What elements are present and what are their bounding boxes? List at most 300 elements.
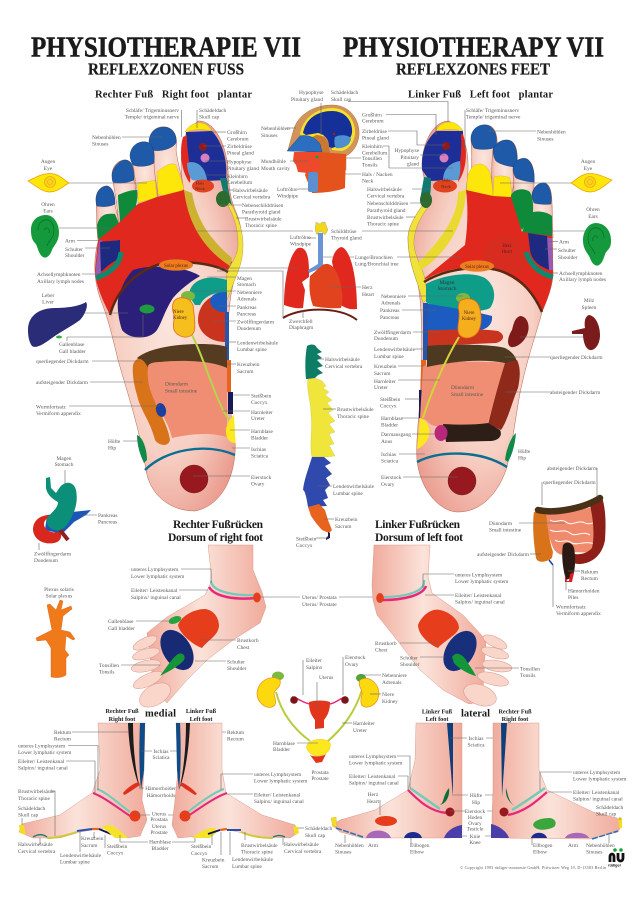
label: sacrum: Sacrum xyxy=(81,843,98,849)
label: uterus prostate: Uterus xyxy=(152,824,166,830)
label: salpinx: Salpinx/ inguinal canal xyxy=(254,799,304,805)
label: bladder: Bladder xyxy=(151,846,169,852)
label: pituitary: Pituitary gland xyxy=(291,97,323,103)
label: parathyroid xyxy=(367,201,428,214)
label: rectum: Rectum xyxy=(227,736,245,742)
label: diaphragm: Zwerchfell xyxy=(289,319,313,325)
organ: bladder zone xyxy=(417,418,430,449)
label: axillary xyxy=(553,271,606,283)
label: salpinx xyxy=(548,790,623,802)
label: sacrum xyxy=(81,832,104,849)
organ: kidney zone xyxy=(172,298,195,337)
label: heart xyxy=(328,285,374,298)
label: chest xyxy=(200,638,259,651)
label: solar plexus: Plexus solaris xyxy=(44,587,74,593)
label: skull cap: Schädeldach xyxy=(18,806,45,812)
label: skull cap: Schädeldach xyxy=(596,805,623,811)
label: pancreas xyxy=(218,305,256,318)
label: sciatica xyxy=(381,452,425,464)
label: windpipe xyxy=(290,234,316,248)
label: descending colon xyxy=(547,466,598,497)
zone: knee xyxy=(491,824,509,838)
label: skull cap xyxy=(331,90,448,122)
label: liver: Liver xyxy=(42,300,54,306)
label: lumbar: Lendenwirbelsäule xyxy=(237,340,278,346)
label: salpinx xyxy=(131,588,208,601)
label: uterus prostate: Uterus xyxy=(152,812,166,818)
label: tonsils: Tonsils xyxy=(520,673,536,679)
zone: sciatica stripe xyxy=(139,723,145,790)
label: thyroid xyxy=(197,229,453,242)
label: thoracic: Brustwirbelsäule xyxy=(241,843,278,849)
label: skull cap: Skull cap xyxy=(305,833,326,839)
label: solar plexus: Solar plexus xyxy=(46,594,72,600)
label: sinuses: Sinuses xyxy=(261,133,277,139)
foot shape xyxy=(172,723,298,838)
organ: brainstem xyxy=(311,135,331,156)
label: cervical: Halswirbelsäule xyxy=(18,842,53,848)
label: adrenals xyxy=(192,290,262,302)
logo: ruediger: rüdiger xyxy=(608,864,622,868)
label: transverse colon xyxy=(505,355,603,361)
label: arm: Arm xyxy=(568,843,579,849)
label: ureter: Harnleiter xyxy=(374,379,396,385)
heading: right dorsum: Rechter Fußrücken xyxy=(173,519,264,531)
label: adrenals xyxy=(360,673,407,686)
label: ureter xyxy=(342,721,375,734)
zone: lymph band xyxy=(382,580,424,597)
label: mouth: Mouth cavity xyxy=(261,166,290,172)
label: windpipe: Windpipe xyxy=(277,194,299,200)
heading: lateral xyxy=(422,708,532,723)
organ: coccyx xyxy=(326,532,330,540)
zone: heart: Herz xyxy=(502,244,512,249)
zone: sciatica xyxy=(501,723,507,797)
label: thoracic: Brustwirbelsäule xyxy=(337,407,374,413)
label: skull cap: Schädeldach xyxy=(199,108,226,114)
zone: lungs red xyxy=(420,190,553,312)
organ: pancreas zone xyxy=(210,292,227,312)
label: knee xyxy=(460,834,497,846)
label: elbow: Ellbogen xyxy=(533,843,552,849)
label: sinuses: Sinuses xyxy=(92,142,108,148)
label: cervical: Halswirbelsäule xyxy=(325,357,360,363)
label: windpipe: Windpipe xyxy=(290,242,312,248)
label: uterus: Uterus xyxy=(319,675,333,681)
zone: eyes yellow xyxy=(138,164,184,203)
organ: ascending colon xyxy=(533,512,553,562)
organ: right kidney xyxy=(359,678,379,707)
icon: eye xyxy=(28,173,69,192)
label: tonsils xyxy=(475,666,540,679)
label: ear xyxy=(545,207,600,231)
panel: urogenital diagram xyxy=(257,655,407,782)
label: eye: Eye xyxy=(584,166,593,172)
label: tonsils: Tonsillen xyxy=(99,663,119,669)
organ: thyroid xyxy=(315,222,328,235)
labels: medial centre xyxy=(120,730,245,852)
zone: eyes yellow xyxy=(466,164,512,203)
label: pancreas: Pancreas xyxy=(98,520,117,526)
label: coccyx: Steißbein xyxy=(191,844,211,850)
label: lymph xyxy=(131,567,211,583)
label: skull cap: Schädeldach xyxy=(331,90,358,96)
label: liver xyxy=(42,293,128,313)
zone: elbow xyxy=(404,832,422,838)
label: cervical: Cervical vertebra xyxy=(325,364,363,370)
zone: uterus xyxy=(130,810,140,822)
label: transverse colon xyxy=(36,359,140,365)
label: anus xyxy=(381,432,436,445)
icon: eye xyxy=(571,173,612,192)
label: knee: Knee xyxy=(469,840,481,846)
label: pineal: Zirbeldrüse xyxy=(362,129,387,135)
label: pituitary: Hypophyse xyxy=(299,90,324,96)
label: axillary xyxy=(37,272,100,285)
label: transverse colon: querliegender Dickdarm xyxy=(550,355,603,361)
label: tonsils: Tonsils xyxy=(99,670,114,676)
zone: ovary xyxy=(180,465,208,493)
label: anus: Darmausgang xyxy=(381,432,411,438)
label: ovary testicle: Testicle xyxy=(467,826,484,832)
label: salpinx xyxy=(303,658,323,695)
label: piles: Piles xyxy=(568,595,578,601)
organ: transverse colon zone xyxy=(137,344,227,368)
label: lumbar: Lumbar spine xyxy=(333,491,363,497)
label: liver: Leber xyxy=(42,293,54,299)
organ: face and mouth xyxy=(293,152,320,173)
label: uterus prostate center: Uterus/ Prostata xyxy=(302,595,337,601)
label: lymph xyxy=(423,572,509,588)
zone: heart: Heart xyxy=(502,250,513,255)
organ: duodenum zone xyxy=(428,329,503,346)
label: ovary xyxy=(343,655,366,695)
spine strip xyxy=(419,303,428,418)
label: sciatica: Sciatica xyxy=(152,755,170,761)
label: sciatica: Sciatica xyxy=(251,454,269,460)
label: adrenals: Nebenniere xyxy=(382,673,407,679)
label: thoracic: Brustwirbelsäule xyxy=(18,789,55,795)
heading: lateral: lateral xyxy=(461,708,490,720)
label: ureter: Harnleiter xyxy=(251,410,273,416)
label: duodenum xyxy=(374,329,440,342)
label: thoracic: Thoracic spine xyxy=(367,222,399,228)
organ: appendix xyxy=(549,560,553,565)
label: duodenum: Zwölffingerdarm xyxy=(34,552,71,558)
panel: thorax xyxy=(217,222,374,331)
organ: stomach xyxy=(46,477,77,531)
label: gall bladder: Gallenblase xyxy=(108,619,133,625)
organ: ureter xyxy=(423,337,459,418)
label: neck xyxy=(335,172,393,184)
foot shape xyxy=(332,723,462,838)
zone: sinuses xyxy=(592,831,618,839)
zone: uterus xyxy=(376,593,384,603)
label: stomach: Stomach xyxy=(237,282,256,288)
organ: kidney zone: Kidney xyxy=(462,317,477,322)
sole strip xyxy=(19,825,128,838)
organ: stomach zone xyxy=(426,274,494,311)
text: small intestine: Small intestine xyxy=(165,388,198,394)
organ: duodenum tube xyxy=(60,530,68,540)
label: chest xyxy=(375,641,438,654)
organ: cervical vertebrae xyxy=(305,345,323,379)
label: sinuses xyxy=(92,135,162,148)
organ: left lung xyxy=(284,248,309,308)
icon: ear xyxy=(31,215,59,258)
label: sinuses: Sinuses xyxy=(537,136,553,142)
organ: adrenal xyxy=(456,293,470,303)
zone: gall bladder xyxy=(168,614,182,626)
organ: duodenum zone xyxy=(198,293,227,342)
label: pineal xyxy=(362,129,445,145)
zone: lymph band xyxy=(188,789,224,812)
label: spleen: Milz xyxy=(584,298,594,304)
label: ureter xyxy=(374,379,440,391)
zone: axillary lymph nodes xyxy=(96,252,121,278)
label: thoracic xyxy=(241,832,278,856)
label: lymph xyxy=(18,744,98,790)
label: stomach: Magen xyxy=(57,456,71,462)
label: stomach xyxy=(55,456,74,490)
label: lymph: unteres Lymphsystem xyxy=(455,572,502,578)
label: elbow xyxy=(532,838,553,856)
zone: ovary xyxy=(446,808,454,816)
label: sacrum xyxy=(202,832,225,870)
label: skull cap xyxy=(18,806,46,825)
label: pancreas: Pankreas xyxy=(237,305,256,311)
panel: medial right foot xyxy=(18,723,147,866)
label: windpipe: Luftröhre xyxy=(277,187,298,193)
label: adrenals: Adrenals xyxy=(381,300,400,306)
label: skull cap xyxy=(197,108,227,128)
label: lumbar xyxy=(318,484,375,497)
label: sciatica: Ischias xyxy=(251,447,266,453)
label: hip xyxy=(518,448,531,462)
label: prostate: Prostate xyxy=(311,776,329,782)
label: cerebellum: Kleinhirn xyxy=(227,174,248,180)
label: adrenals: Nebenniere xyxy=(381,294,406,300)
organ: uterus xyxy=(309,700,330,729)
label: hip: Hip xyxy=(518,456,526,462)
label: temple nerve: Temple/ trigeminal nerve xyxy=(466,114,521,120)
label: parathyroid: Nebenschilddrüsen xyxy=(367,201,408,207)
label: cervical xyxy=(224,188,271,200)
zone: sciatica xyxy=(447,723,453,797)
icon: liver xyxy=(28,302,87,347)
label: eye xyxy=(41,159,147,183)
big toe zones: Neck xyxy=(441,184,452,189)
label: skull cap: Skull cap xyxy=(596,812,617,818)
label: shoulder: Schulter xyxy=(65,247,83,253)
label: parathyroid: Parathyroid gland xyxy=(242,210,281,216)
labels: lateral centre xyxy=(450,736,505,846)
label: elbow xyxy=(410,838,430,856)
label: pineal: Pineal gland xyxy=(227,150,254,156)
label: parathyroid: Parathyroid gland xyxy=(367,208,406,214)
label: pineal xyxy=(203,144,254,156)
label: lymph: unteres Lymphsystem xyxy=(254,772,301,778)
label: adrenals xyxy=(381,294,463,306)
label: coccyx: Coccyx xyxy=(380,404,397,410)
label: uterus prostate: Prostate xyxy=(150,830,168,836)
label: lymph xyxy=(540,770,627,790)
label: sciatica: Ischias xyxy=(381,452,396,458)
organ: lumbar vertebrae xyxy=(303,457,332,507)
label: temple nerve xyxy=(125,107,182,137)
label: kidney: Niere xyxy=(382,692,394,698)
label: arm xyxy=(65,238,98,244)
label: lymph: unteres Lymphsystem xyxy=(349,754,396,760)
zone: lymph band xyxy=(211,581,256,595)
label: sacrum: Kreuzbein xyxy=(202,858,224,864)
label: cervical xyxy=(18,838,56,855)
label: rectum xyxy=(54,730,128,742)
label: lymph: Lower lymphatic system xyxy=(18,750,72,756)
organ: appendix zone xyxy=(154,402,168,418)
label: pancreas: Pankreas xyxy=(98,513,117,519)
label: cerebrum: Cerebrum xyxy=(227,136,249,142)
label: pineal: Pineal gland xyxy=(362,136,389,142)
label: skull cap xyxy=(596,805,624,820)
label: coccyx xyxy=(105,835,128,856)
text: small intestine: Dünndarm xyxy=(451,385,474,391)
zone: olive band xyxy=(418,190,466,270)
label: cervical: Halswirbelsäule xyxy=(233,188,268,194)
label: sciatica: Ischias xyxy=(469,736,483,742)
text: small intestine: Small intestine xyxy=(451,392,484,398)
zone: axillary lymph nodes xyxy=(526,252,553,277)
label: chest: Chest xyxy=(237,645,250,651)
label: small intestine: Dünndarm xyxy=(489,521,512,527)
label: lung: Lunge/Bronchien xyxy=(355,255,393,261)
label: ascending colon: aufsteigender Dickdarm xyxy=(36,379,89,386)
toes: right foot xyxy=(96,127,184,240)
label: cervical: Cervical vertebra xyxy=(18,849,56,855)
heading: medial: medial xyxy=(145,708,176,720)
label: ovary: Eierstock xyxy=(381,475,401,481)
zone: sinuses blue toes xyxy=(96,127,176,207)
title: German: PHYSIOTHERAPIE VII xyxy=(31,32,301,64)
panel: stomach diagram xyxy=(33,456,117,564)
label: thoracic: Thoracic spine xyxy=(241,850,273,856)
label: appendix xyxy=(36,404,160,417)
label: coccyx xyxy=(191,833,212,857)
label: sacrum xyxy=(324,517,358,530)
label: salpinx: Eileiter/ Leistenkanal xyxy=(18,759,64,765)
label: shoulder: Schulter xyxy=(558,248,576,254)
zone: heart xyxy=(375,816,397,826)
label: sinuses: Sinuses xyxy=(335,850,351,856)
zone: shoulder xyxy=(153,624,201,676)
label: lumbar: Lendenwirbelsäule xyxy=(333,484,374,490)
organ: sinus cavity xyxy=(287,135,322,152)
zone: lymph band xyxy=(410,788,440,809)
label: duodenum xyxy=(214,318,275,332)
zone: uterus xyxy=(253,592,261,602)
label: lumbar xyxy=(226,340,279,353)
label: thoracic: Brustwirbelsäule xyxy=(245,216,282,222)
label: heart: Heart xyxy=(367,799,379,805)
label: pituitary: Hypophyse xyxy=(227,159,252,165)
label: shoulder: Shoulder xyxy=(65,253,85,259)
panel: left foot plantar xyxy=(408,121,553,512)
zone: hemorrhoids xyxy=(123,782,140,795)
zone: inguinal band xyxy=(508,792,547,815)
label: mouth xyxy=(261,159,308,172)
label: transverse colon xyxy=(542,480,596,505)
organ: liver zone xyxy=(118,267,200,338)
label: shoulder: Schulter xyxy=(227,660,245,666)
label: pineal: Zirbeldrüse xyxy=(227,144,252,150)
label: hip: Hip xyxy=(108,446,116,452)
label: coccyx: Steißbein xyxy=(107,844,127,850)
label: hip: Hüfte xyxy=(108,439,120,445)
label: pituitary xyxy=(291,90,324,135)
label: cervical: Cervical vertebra xyxy=(233,194,271,200)
label: elbow: Ellbogen xyxy=(410,843,429,849)
label: bladder: Harnblase xyxy=(381,416,403,422)
label: ureter: Ureter xyxy=(251,416,265,422)
label: ear xyxy=(41,202,110,228)
label: pancreas: Pankreas xyxy=(380,308,399,314)
heading: lateral: Linker Fuß xyxy=(422,708,452,716)
label: heart xyxy=(367,792,380,815)
zone: elbow xyxy=(531,833,547,838)
label: sinuses: Nebenhöhlen xyxy=(261,126,290,132)
zone: thoracic spine band xyxy=(226,198,243,302)
label: sciatica xyxy=(232,447,269,460)
toes: left dorsum xyxy=(461,632,513,710)
label: salpinx xyxy=(349,774,408,790)
label: ureter: Harnleiter xyxy=(353,721,375,727)
organ: stomach zone xyxy=(189,278,227,305)
label: sacrum: Sacrum xyxy=(335,524,352,530)
label: rectum: Rectum xyxy=(581,576,599,582)
organ: kidney zone xyxy=(458,299,481,338)
label: temple nerve: Schläfe/ Trigeminusnerv xyxy=(466,108,519,114)
label: ovary testicle: Eierstock xyxy=(465,809,485,815)
label: thoracic xyxy=(236,216,282,229)
label: sinuses: Nebenhöhlen xyxy=(335,843,364,849)
label: prostate: Prostata xyxy=(311,770,329,776)
label: sinuses xyxy=(335,835,364,856)
organ: left kidney xyxy=(257,678,280,707)
label: salpinx: Salpinx/ inguinal canal xyxy=(349,780,399,786)
label: salpinx: Salpinx/ inguinal canal xyxy=(455,600,505,606)
zone: uterus xyxy=(180,810,190,822)
label: sciatica xyxy=(141,749,180,761)
label: stomach xyxy=(207,276,256,288)
label: coccyx: Coccyx xyxy=(107,850,124,856)
solar plexus zone xyxy=(460,260,494,272)
label: appendix: Wurmfortsatz xyxy=(36,404,66,410)
label: haemorrhoids: Hämorrhoids xyxy=(147,793,175,799)
label: bladder xyxy=(381,416,420,428)
diaphragm arc xyxy=(424,268,542,312)
label: pituitary xyxy=(205,159,259,172)
organ: anus zone xyxy=(434,425,448,441)
label: ovary: Eierstock xyxy=(251,475,271,481)
label: skull cap xyxy=(298,826,333,839)
organ: neck xyxy=(305,152,346,193)
label: duodenum xyxy=(34,543,72,564)
label: rectum xyxy=(568,570,599,582)
heading: medial xyxy=(105,708,217,723)
text: stomach: Magen xyxy=(440,280,454,286)
zone: inguinal band xyxy=(188,793,227,816)
organ: skull yellow ring xyxy=(300,108,355,151)
